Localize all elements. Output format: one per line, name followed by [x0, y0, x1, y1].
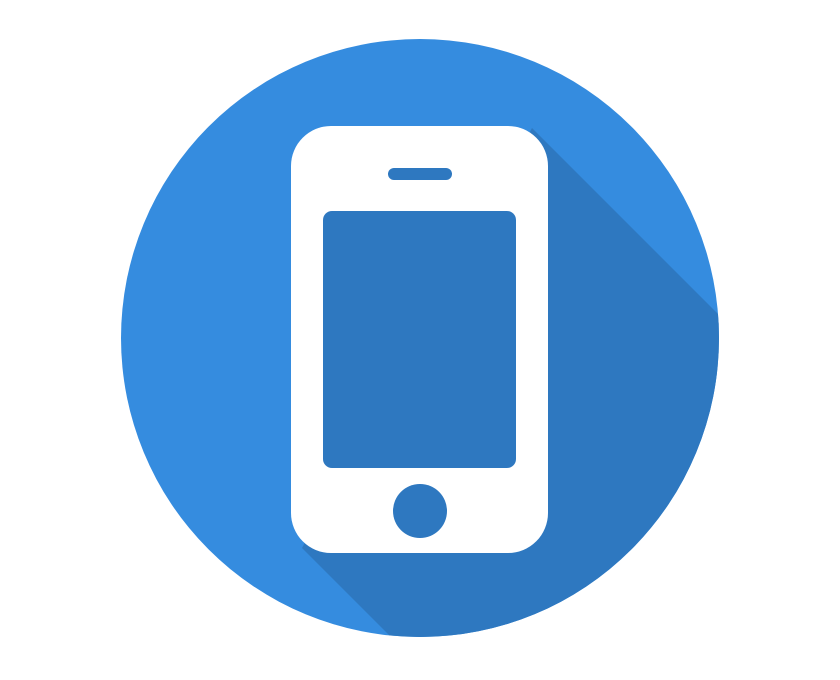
blue circle background: [121, 39, 719, 637]
speaker slot: [388, 168, 452, 180]
screen: [323, 211, 516, 468]
phone: [291, 126, 548, 553]
icon: mobile phone in blue circle: [121, 39, 719, 637]
long shadow: [302, 128, 719, 637]
home button: [393, 484, 447, 538]
